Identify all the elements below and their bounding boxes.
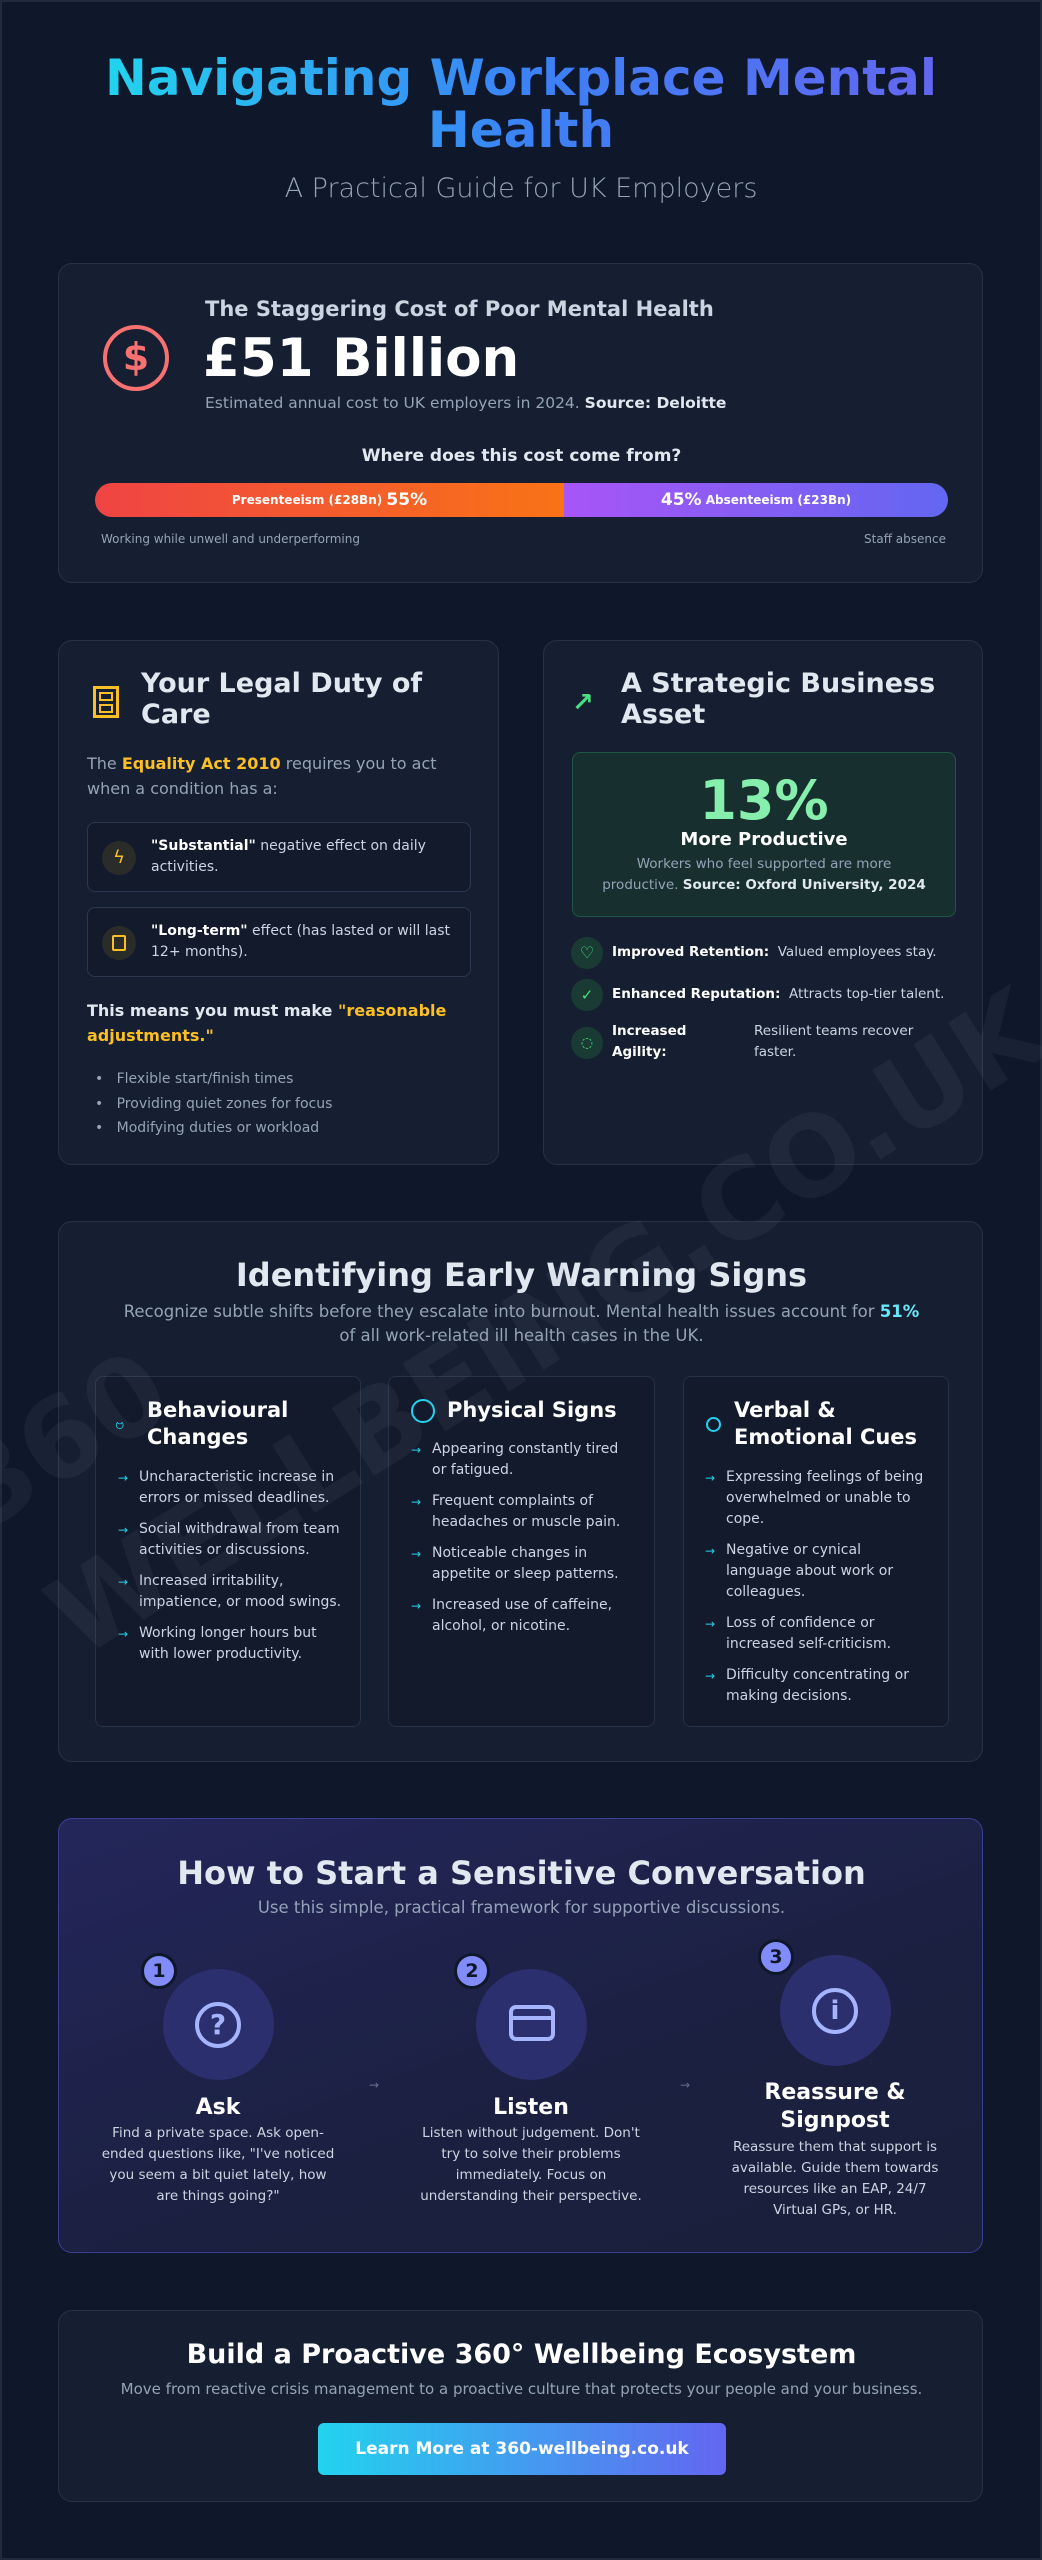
step 3: 3 bbox=[769, 1946, 783, 1968]
stat box: 13% bbox=[699, 769, 829, 832]
box: long-term: "Long-term" effect (has lasted or will last 12+ months). bbox=[151, 923, 450, 960]
card: physical: → bbox=[411, 1443, 421, 1457]
heading: Identifying Early Warning Signs bbox=[236, 1256, 807, 1294]
panel: conversation bbox=[58, 1818, 983, 2253]
card: behavioural: Uncharacteristic increase in errors or missed deadlines. bbox=[139, 1469, 334, 1506]
card: behavioural bbox=[95, 1376, 361, 1727]
card heading: Verbal & bbox=[734, 1398, 836, 1422]
card heading: Behavioural bbox=[147, 1398, 288, 1422]
box: substantial: ϟ bbox=[113, 847, 125, 868]
icon: trend: ↗ bbox=[572, 688, 594, 718]
benefit: agility: ◌ bbox=[581, 1035, 593, 1051]
heading: How to Start a Sensitive Conversation bbox=[177, 1854, 866, 1892]
card: physical: → bbox=[411, 1547, 421, 1561]
benefit: agility: faster. bbox=[754, 1044, 796, 1060]
benefit: retention: Improved Retention: Valued employees stay. bbox=[612, 944, 937, 960]
bullet list: • Modifying duties or workload bbox=[95, 1120, 319, 1136]
box: long-term bbox=[87, 907, 471, 977]
card: behavioural: → bbox=[118, 1627, 128, 1641]
heading: Your Legal Duty of bbox=[141, 668, 422, 699]
panel: warning signs bbox=[58, 1221, 983, 1762]
step 3: Reassure them that support is available. Guide them towards resources like an EAP, 24/7 Virtual GPs, or HR. bbox=[732, 2139, 938, 2218]
card: physical: → bbox=[411, 1599, 421, 1613]
card: verbal: → bbox=[705, 1544, 715, 1558]
benefit: reputation bbox=[571, 979, 944, 1011]
step 2 bbox=[420, 1953, 642, 2204]
bar captions bbox=[101, 532, 946, 546]
heading: Build a Proactive 360° Wellbeing Ecosystem bbox=[187, 2339, 856, 2370]
card: behavioural: → bbox=[118, 1471, 128, 1485]
cost heading: The Staggering Cost of Poor Mental Health bbox=[205, 297, 714, 321]
icon: building bbox=[93, 686, 119, 718]
benefit: reputation: ✓ bbox=[581, 986, 593, 1004]
description: Recognize subtle shifts before they escalate into burnout. Mental health issues account for 51% bbox=[124, 1302, 919, 1321]
step 3: Signpost bbox=[780, 2108, 890, 2133]
stat box: Workers who feel supported are more bbox=[637, 856, 891, 872]
icon: user bbox=[411, 1399, 435, 1423]
step 3: Reassure & bbox=[764, 2080, 906, 2105]
bar captions: Staff absence bbox=[864, 532, 946, 546]
card: physical: Frequent complaints of headaches or muscle pain. bbox=[432, 1493, 620, 1530]
big number: £51 Billion bbox=[203, 328, 519, 389]
arrow 2: → bbox=[680, 2078, 690, 2092]
card: physical bbox=[388, 1376, 655, 1727]
card: behavioural: Social withdrawal from team activities or discussions. bbox=[139, 1521, 340, 1558]
heading: A Strategic Business bbox=[621, 668, 935, 699]
card: behavioural: Working longer hours but with lower productivity. bbox=[139, 1625, 317, 1662]
title bbox=[60, 52, 982, 156]
icon: currency bbox=[103, 325, 169, 391]
step 1: ? bbox=[210, 2008, 226, 2041]
card: behavioural: → bbox=[118, 1523, 128, 1537]
button: Learn More at 360-wellbeing.co.uk bbox=[355, 2439, 689, 2459]
watermark: WELLBEING.CO.UK bbox=[26, 964, 1042, 1682]
stacked bar: 45% bbox=[661, 490, 702, 510]
step 2: Listen without judgement. Don't try to solve their problems immediately. Focus on understanding their perspective. bbox=[420, 2125, 642, 2204]
card: physical: Noticeable changes in appetite or sleep patterns. bbox=[432, 1545, 619, 1582]
step 3: i bbox=[831, 1996, 839, 2026]
step 2: Listen bbox=[493, 2095, 569, 2120]
icon: people: ဗ bbox=[115, 1414, 124, 1433]
panel: legal duty bbox=[58, 640, 499, 1165]
box: substantial bbox=[87, 822, 471, 892]
description: of all work-related ill health cases in the UK. bbox=[339, 1326, 704, 1345]
benefit: agility: Resilient teams recover bbox=[754, 1023, 913, 1039]
benefit: agility: Agility: bbox=[612, 1044, 667, 1060]
card: behavioural: Increased irritability, impatience, or mood swings. bbox=[139, 1573, 341, 1610]
panel: cta bbox=[58, 2310, 983, 2502]
heading: Asset bbox=[621, 699, 705, 730]
card: verbal: Negative or cynical language about work or colleagues. bbox=[726, 1542, 893, 1600]
benefit: retention bbox=[571, 937, 937, 969]
card: physical: → bbox=[411, 1495, 421, 1509]
card: verbal: Expressing feelings of being overwhelmed or unable to cope. bbox=[726, 1469, 923, 1527]
title: Navigating Workplace Mental bbox=[105, 49, 937, 107]
card: physical: Increased use of caffeine, alcohol, or nicotine. bbox=[432, 1597, 612, 1634]
step 3 bbox=[732, 1939, 938, 2218]
icon: chat bbox=[706, 1417, 721, 1432]
subtitle: A Practical Guide for UK Employers bbox=[285, 173, 757, 204]
benefit: agility bbox=[571, 1023, 914, 1060]
heading bbox=[140, 668, 422, 730]
card heading: Emotional Cues bbox=[734, 1425, 917, 1449]
stat box: More Productive bbox=[680, 829, 848, 850]
stacked bar: Presenteeism (£28Bn) bbox=[232, 493, 382, 507]
box: substantial: "Substantial" negative effect on daily activities. bbox=[151, 838, 426, 875]
step 1: 1 bbox=[152, 1960, 166, 1982]
stat box bbox=[572, 752, 956, 917]
button bbox=[318, 2423, 726, 2475]
card: verbal: Loss of confidence or increased self-criticism. bbox=[726, 1615, 891, 1652]
stacked bar: 55% bbox=[386, 490, 427, 510]
intro text: The Equality Act 2010 requires you to act when a condition has a: bbox=[87, 754, 437, 798]
stacked bar: Absenteeism (£23Bn) bbox=[706, 493, 851, 507]
panel: business asset bbox=[543, 640, 983, 1165]
benefit: retention: ♡ bbox=[580, 943, 594, 962]
card: verbal: → bbox=[705, 1617, 715, 1631]
adjustments text: This means you must make "reasonable adjustments." bbox=[87, 1001, 446, 1045]
card: verbal: → bbox=[705, 1471, 715, 1485]
card: verbal: Difficulty concentrating or making decisions. bbox=[726, 1667, 909, 1704]
card heading bbox=[734, 1398, 917, 1449]
bar captions: Working while unwell and underperforming bbox=[101, 532, 360, 546]
step 1 bbox=[102, 1953, 334, 2204]
card: verbal bbox=[683, 1376, 949, 1727]
description bbox=[124, 1302, 919, 1345]
card: physical: Appearing constantly tired or fatigued. bbox=[432, 1441, 618, 1478]
bar heading: Where does this cost come from? bbox=[362, 446, 681, 466]
benefit: agility: Increased bbox=[612, 1023, 686, 1039]
icon: currency: $ bbox=[123, 335, 149, 379]
subheading: Use this simple, practical framework for supportive discussions. bbox=[258, 1898, 785, 1917]
card heading: Changes bbox=[147, 1425, 248, 1449]
stacked bar bbox=[95, 483, 948, 517]
panel: cost bbox=[58, 263, 983, 583]
description: Move from reactive crisis management to a proactive culture that protects your people and your business. bbox=[121, 2380, 922, 2398]
step 2: 2 bbox=[465, 1960, 479, 1982]
card: behavioural: → bbox=[118, 1575, 128, 1589]
heading: Care bbox=[141, 699, 211, 730]
card heading bbox=[147, 1398, 288, 1449]
stat box: productive. Source: Oxford University, 2024 bbox=[602, 877, 926, 893]
bullet list: • Providing quiet zones for focus bbox=[95, 1096, 332, 1112]
arrow 1: → bbox=[369, 2078, 379, 2092]
bullet list bbox=[95, 1071, 332, 1136]
title: Health bbox=[428, 101, 614, 159]
card: verbal: → bbox=[705, 1669, 715, 1683]
bullet list: • Flexible start/finish times bbox=[95, 1071, 293, 1087]
card heading: Physical Signs bbox=[447, 1398, 617, 1422]
step 1: Find a private space. Ask open-ended questions like, "I've noticed you seem a bit quiet lately, how are things going?" bbox=[102, 2125, 334, 2204]
benefit: reputation: Enhanced Reputation: Attracts top-tier talent. bbox=[612, 986, 944, 1002]
step 1: Ask bbox=[196, 2095, 240, 2120]
heading bbox=[621, 668, 935, 730]
source line: Estimated annual cost to UK employers in 2024. Source: Deloitte bbox=[205, 394, 726, 412]
